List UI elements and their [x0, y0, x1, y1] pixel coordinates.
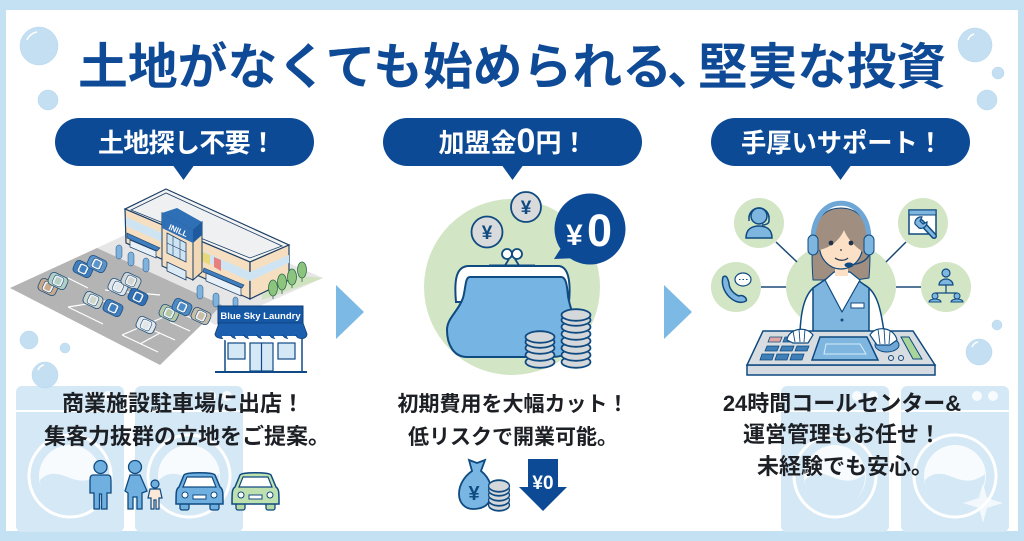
illustration: shopping mall and parking lot: INILL: [167, 223, 189, 239]
icon: man: [90, 460, 111, 509]
heading pill: 土地探し不要: 土地探し不要！: [98, 128, 276, 158]
text block: 商業施設: 商業施設駐車場に出店！: [62, 391, 304, 416]
icon: down arrow ¥0: [519, 459, 567, 511]
icon: headset agent: [734, 198, 784, 248]
hands: [787, 329, 813, 343]
right wall: [250, 245, 289, 299]
icon: down arrow ¥0: ¥0: [532, 473, 554, 494]
icon: green car: [232, 473, 279, 510]
parked cars: [37, 254, 212, 335]
illustration: Blue Sky Laundry store: Blue Sky Laundry: [220, 311, 301, 322]
¥0 speech bubble: 0: [587, 205, 612, 256]
text block: 24時間: 24時間コールセンター&: [723, 391, 961, 416]
yen coins: ¥: [521, 198, 532, 219]
trees ground: [262, 275, 323, 300]
decorative bubbles: [20, 27, 1004, 388]
icon: browser wrench: [898, 198, 948, 248]
text block: 初期費用: [398, 393, 628, 449]
yen coins: ¥: [482, 223, 493, 244]
control console: [747, 328, 935, 375]
headset: [813, 203, 869, 240]
text block: 商業施設: 集客力抜群の立地をご提案。: [44, 424, 330, 449]
heading pill: 加盟金0円: 加盟金0円！: [439, 122, 587, 160]
text block: 24時間: [723, 391, 961, 479]
illustration: Blue Sky Laundry store: [215, 306, 307, 372]
clasp: [489, 264, 535, 268]
purse body: [447, 277, 578, 357]
people: [116, 245, 238, 307]
icon: blue car: [176, 473, 223, 510]
illustration: call centre operator: [711, 198, 971, 375]
icon: woman: [125, 460, 147, 509]
operator figure: [800, 203, 884, 332]
left wall: [125, 209, 250, 299]
connector lines: [761, 242, 921, 287]
yen coins: [472, 192, 541, 248]
icon: child: [148, 480, 162, 509]
text block: 初期費用: 低リスクで開業可能。: [408, 426, 618, 449]
arrow 2: [664, 285, 692, 339]
¥0 speech bubble: [554, 194, 626, 264]
text block: 24時間: 未経験でも安心。: [757, 454, 933, 479]
¥0 speech bubble: ¥: [566, 219, 583, 252]
decorative washing machines: [16, 386, 1009, 532]
plaza ground: [97, 220, 323, 325]
illustration: coin purse: [424, 192, 626, 375]
coin stacks: [526, 309, 590, 368]
roof: [125, 189, 289, 262]
text block: 初期費用: 初期費用を大幅カット！: [398, 393, 628, 416]
illustration: shopping mall and parking lot: [10, 189, 323, 365]
icon: organisation chart: [921, 262, 971, 312]
purse frame: [455, 266, 570, 302]
icon: phone and chat: [711, 262, 761, 312]
icon: money bag: [459, 460, 509, 511]
text block: 24時間: 運営管理もお任せ！: [743, 422, 941, 447]
title: 、: [667, 40, 716, 95]
shop colours: [200, 251, 210, 265]
text block: 商業施設: [44, 391, 330, 449]
heading pill: 土地探し不要: [55, 118, 314, 180]
arrow 1: [336, 285, 364, 339]
title: 堅実な投資: [698, 40, 946, 95]
icon: money bag: ¥: [468, 483, 480, 505]
heading pill: 手厚いサポート: 手厚いサポート！: [741, 128, 943, 158]
heading pill: 加盟金0円: [383, 118, 642, 180]
entrance tower: [162, 213, 193, 280]
title: 土地がなくても始められる: [78, 40, 672, 95]
parking lot: [10, 248, 222, 365]
icons: family and cars: [90, 460, 279, 510]
awnings: [127, 233, 160, 251]
heading pill: 手厚いサポート: [711, 118, 970, 180]
trees: [268, 262, 306, 299]
glass band: [126, 217, 250, 281]
